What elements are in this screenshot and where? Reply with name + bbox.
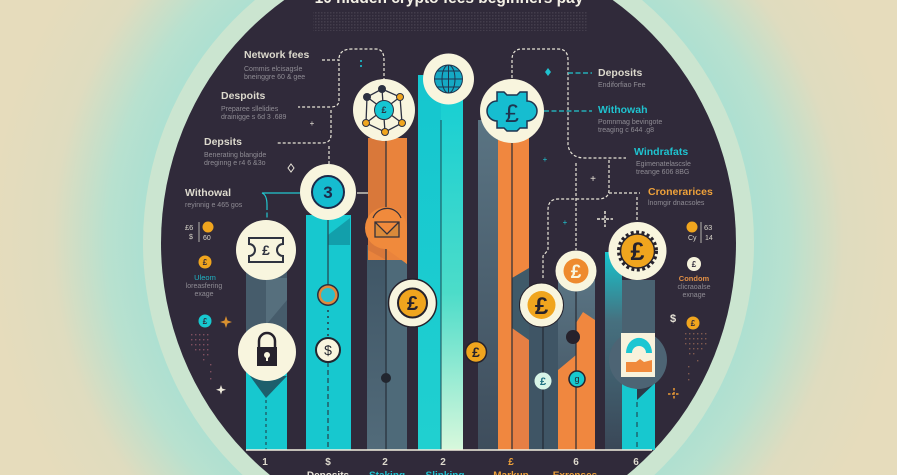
small decorations: + [310,119,315,128]
icon: pale pound marker: £ [540,376,546,388]
icon: large pound coin: £ [535,293,549,320]
icon: teal marker: g [574,374,580,384]
label: deposits 1: Preparee sllelidies [221,106,279,113]
icon: gear coin [608,222,666,280]
label: deposits 1: drainigge s 6d 3 .689 [221,114,286,121]
stat: left: 60 [203,235,211,242]
stat: left: £6 [185,223,193,232]
label: network fees [244,49,310,81]
icon: pound badge: £ [505,100,519,128]
icon: right coin and dollar [668,313,700,400]
icon: ticket: £ [262,242,270,258]
label: withdrawals right: Windrafats [634,146,688,158]
icon: teal coin: 3 [323,183,333,202]
axis labels: $ [325,457,331,468]
label: left note [186,256,222,298]
icon: gear coin: £ [631,238,645,266]
label: withdrawal right: Pomnmag bevingote [598,119,662,126]
label: withdrawal right: treaging c 644 .g8 [598,127,654,134]
icon: rainbow card [609,331,667,389]
small decorations: + [590,174,596,185]
icon: teal marker [569,371,585,387]
dark circular panel [161,0,736,475]
label: left note: loreasfering [186,283,222,290]
bar 1 [246,270,287,450]
stat: right: 63 [704,223,712,232]
marker dot [381,373,391,383]
bar 6 [529,310,558,450]
stat: right [686,222,713,243]
label: conversion right [648,186,713,207]
bar 5 [478,120,529,450]
icon: dollar marker [316,338,340,362]
label: withdrawal right: Withowah [598,104,647,116]
icon: globe [423,54,474,104]
icon: pound coin centre: £ [407,293,418,315]
icon: pound badge [480,79,544,143]
small decorations: + [563,218,568,227]
label: right note: clicraoalse [677,284,711,291]
label: deposits 2 [204,136,266,167]
icon: left coin and sparkle [198,314,232,394]
label: left note: exage [194,291,214,298]
icon: right coin and dollar: £ [691,319,696,328]
axis labels: 2 [382,457,388,468]
label: withdrawal: Withowal [185,187,231,199]
label: withdrawals right: Egimenatelascsle [636,161,691,168]
dotted band under title [313,12,587,31]
label: left note: Uleom [194,273,216,282]
icon: dollar marker: $ [324,342,332,358]
bar 8 [605,252,655,450]
label: right note: £ [692,260,697,269]
label: left note: £ [203,258,208,267]
label: conversion right: lnomgir dnacsoles [648,200,705,207]
label: right note: exnage [683,292,706,299]
axis labels [262,457,639,475]
label: deposits 1 [221,90,286,121]
icon: small pound coin: £ [472,344,480,360]
label: deposits 2: Depsits [204,136,242,148]
dot pattern: right [685,333,706,380]
bar 7 [558,280,595,450]
label: withdrawal right [598,104,662,134]
stat: left: $ [189,234,193,241]
label: withdrawal: reyinnig e 465 gos [185,202,243,209]
icon: ticket [236,220,296,280]
label: conversion right: Cronerarices [648,186,713,198]
label: withdrawals right: treange 606 8BG [636,169,689,176]
bar 2 [306,215,351,450]
icon: pale pound marker [534,372,552,390]
bar 3 [367,138,407,450]
axis labels: £ [508,457,514,468]
connector lines [262,49,640,278]
marker dot [566,330,580,344]
label: deposits right: Deposits [598,67,643,79]
label: deposits 2: Benerating blangide [204,152,266,159]
icon: network [353,79,415,141]
icon: envelope on orange bubble [365,207,407,264]
icon: right coin and dollar: $ [670,313,676,325]
stat: right: Cy [688,235,697,242]
icon: network: £ [381,105,387,115]
label: withdrawal [185,187,243,209]
icon: orange pound coin: £ [571,262,582,283]
icon: left coin and sparkle: £ [203,317,208,326]
axis labels: 6 [633,457,639,468]
bar chart [246,75,655,450]
icon: pound coin centre [388,279,436,327]
stat: left [185,222,214,242]
small decorations [288,60,613,227]
icon: orange pound coin [556,250,596,292]
small decorations: + [543,155,548,164]
axis labels: 1 [262,457,268,468]
axis labels: 2 [440,457,446,468]
baseline [246,449,652,451]
icon: small pound coin [466,342,486,362]
icon: teal coin [300,164,356,220]
label: deposits right [598,67,646,89]
icon: ring marker [317,284,339,306]
label: deposits 1: Despoits [221,90,266,102]
label: network fees: bneinggre 60 & gee [244,74,305,81]
icon: lock [238,323,296,381]
label: deposits right: Endiforfiao Fee [598,82,646,89]
label: deposits 2: dreginng e r4 6 &3o [204,160,266,167]
label: withdrawals right [634,146,691,176]
outer pale ring [143,0,754,475]
label: network fees: Network fees [244,49,310,61]
axis labels: 6 [573,457,579,468]
stat: right: 14 [705,235,713,242]
icon: large pound coin [520,283,564,327]
bar 4 [418,75,463,450]
label: right note [677,257,711,299]
label: right note: Condom [679,274,710,283]
label: network fees: Commis elcisagsle [244,66,302,73]
dot pattern: left [191,334,211,379]
